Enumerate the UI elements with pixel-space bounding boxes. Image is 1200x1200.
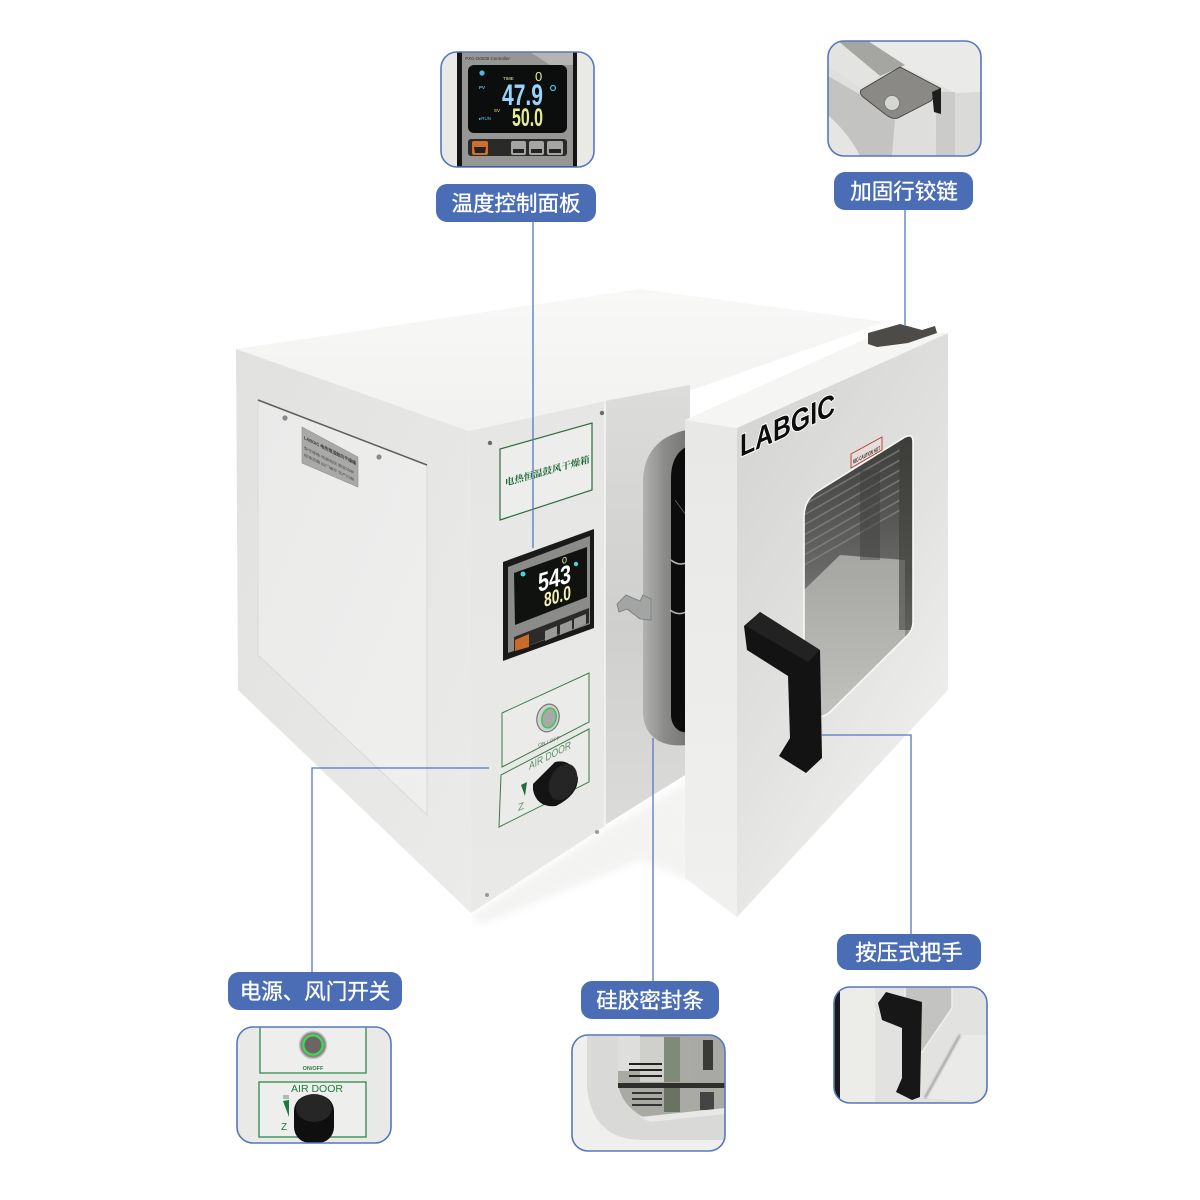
thumbnail: controller: TIME [503, 76, 514, 81]
callout: press handle [834, 934, 987, 1103]
oven left side [236, 349, 471, 913]
control panel plate [469, 401, 605, 913]
air door box [499, 729, 589, 827]
callout: temperature control panel [436, 52, 596, 222]
label [436, 184, 596, 222]
callout: power and air door switches [228, 972, 402, 1143]
temperature controller: 0 [562, 555, 567, 566]
thumbnail: controller: 47.9 [502, 79, 543, 112]
power switch box: ON / OFF [538, 736, 560, 749]
thumbnail: switches: Z [281, 1122, 287, 1133]
label [837, 934, 981, 970]
label [581, 981, 719, 1019]
label: 温度控制面板 [451, 192, 581, 216]
label: 硅胶密封条 [596, 989, 704, 1013]
panel screws [488, 441, 492, 445]
floor shadow [472, 782, 690, 925]
nameplate box: 电热恒温鼓风干燥箱 [505, 453, 590, 489]
air door knob [533, 759, 583, 806]
temperature controller: 543 [538, 559, 571, 598]
air door box: AIR DOOR [529, 739, 571, 773]
hinge [868, 324, 937, 347]
label: 加固行铰链 [850, 180, 958, 204]
door handle [744, 612, 822, 773]
nameplate box [500, 423, 592, 520]
oven product illustration [236, 289, 948, 925]
recessed front face [605, 385, 690, 825]
warning sticker: MIC-CAUTION HOT [853, 445, 880, 466]
oven top face [236, 289, 885, 431]
thumbnail: controller: 0 [535, 69, 542, 84]
door latch [617, 595, 651, 620]
nameplate: 控温范围 出厂编号 生产日期 [304, 452, 354, 482]
side access panel [258, 400, 427, 815]
label [228, 972, 402, 1010]
thumbnail: switches: AIR DOOR [291, 1083, 343, 1095]
door front [737, 333, 948, 917]
thumbnail: controller: ▸RUN [479, 116, 491, 121]
door hinge edge [685, 420, 737, 917]
silicone door gasket [643, 430, 686, 745]
thumbnail: switches: ON/OFF [303, 1066, 324, 1072]
side screws [282, 415, 288, 421]
door window [804, 436, 913, 720]
callout: reinforced hinge [828, 41, 981, 210]
warning sticker [851, 437, 882, 468]
label [834, 172, 973, 210]
thumbnail: controller: PV [479, 85, 485, 90]
thumbnail: controller: SV [494, 108, 500, 113]
open door [685, 324, 948, 917]
thumbnail: controller [441, 52, 594, 167]
nameplate: LABGIC 电热恒温鼓风干燥箱 [304, 434, 356, 467]
thumbnail: controller: 50.0 [512, 104, 543, 132]
label: 电源、风门开关 [240, 980, 390, 1004]
nameplate: 型号规格 电源电压 额定功率 [304, 445, 354, 475]
callout: silicone seal [572, 981, 725, 1151]
thumbnail: seal [572, 1035, 725, 1151]
thumbnail: hinge [828, 41, 981, 156]
thumbnail: handle [834, 987, 987, 1103]
label: 按压式把手 [855, 941, 963, 965]
power switch box [502, 673, 589, 767]
door top bevel [685, 330, 948, 428]
leader lines [312, 210, 911, 981]
temperature controller: 80.0 [544, 581, 571, 612]
air door box: Z [518, 801, 525, 814]
thumbnail: controller: PXG-D0036 Controller [465, 56, 511, 61]
LABGIC logo: LABGIC [740, 387, 835, 464]
nameplate [302, 427, 358, 487]
thumbnail: switches [237, 1027, 391, 1143]
temperature controller [503, 529, 594, 661]
